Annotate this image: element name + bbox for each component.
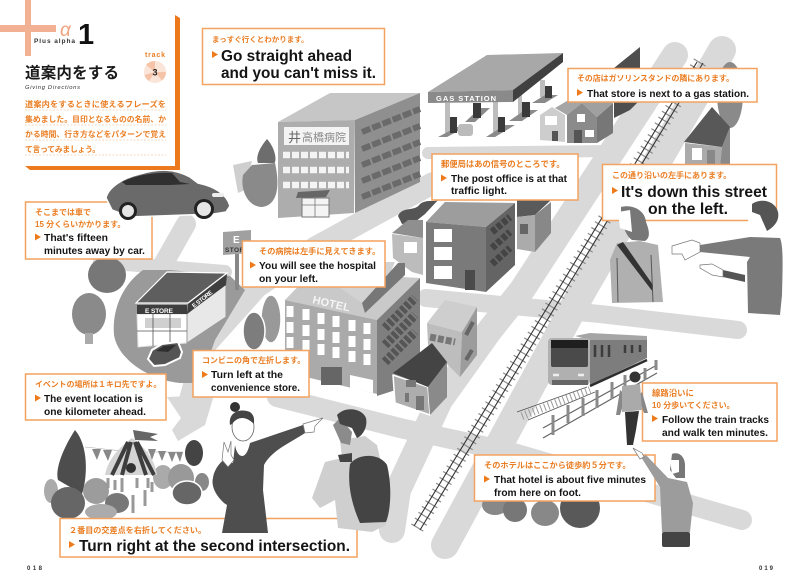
callout: go straight: Go straight ahead [221,48,352,65]
gas station: GAS STATION [436,94,496,103]
callout: event location: one kilometer ahead. [44,407,146,418]
callout: gas station [568,68,757,102]
hotel [285,262,420,396]
callout: follow train tracks: and walk ten minutes. [662,428,768,439]
alpha symbol: α [60,20,72,41]
callout: event location: The event location is [44,394,143,405]
callout: down this street: この通り沿いの左手にあります。 [612,170,731,180]
callout: turn left [193,350,309,397]
trees bottom right [482,488,600,528]
lesson number: 1 [78,19,94,51]
callout: event location [26,374,166,420]
callout: turn right: ２番目の交差点を右折してください。 [69,525,206,535]
callout: post office: 郵便局はあの信号のところです。 [441,159,565,169]
hospital trees [233,139,277,207]
track badge [144,52,166,83]
callout: post office: traffic light. [451,186,507,197]
convenience store: E STORE [192,290,214,310]
title: 道案内をする [25,64,119,82]
callout: hospital [242,241,385,287]
intro paragraph: て言ってみましょう。 [25,145,100,154]
callout: hospital: You will see the hospital [259,261,376,272]
callout: hospital: on your left. [259,274,318,285]
plus symbol [0,0,56,56]
callout: hospital: その病院は左手に見えてきます。 [259,246,380,256]
callout: hotel: That hotel is about five minutes [494,475,646,486]
E store sign [223,230,251,290]
walking man with backpack [616,372,648,445]
callout: follow train tracks: 線路沿いに [652,388,694,398]
callout: turn right: Turn right at the second intersection. [79,538,350,555]
callout: fifteen minutes: そこまでは車で [35,207,91,217]
callout: go straight: まっすぐ行くとわかります。 [212,34,308,44]
parked car [148,342,182,366]
hospital building: 井 [288,130,301,145]
callout: hotel: そのホテルはここから徒歩約５分です。 [484,460,631,470]
callout: event location: イベントの場所は１キロ先ですよ。 [35,379,161,389]
car [106,170,230,220]
callout: go straight [202,28,384,84]
hotel: HOTEL [311,294,351,315]
fence [543,360,657,438]
callout: turn right [60,518,357,557]
header decoration: plus alpha [0,0,180,170]
hospital building: 高橋病院 [302,130,346,144]
gas station [428,53,563,137]
callout: down this street: on the left. [648,201,728,218]
festival scene [44,430,209,520]
callout: fifteen minutes: That's fifteen [44,233,108,244]
railway tracks [414,62,703,530]
track badge: 3 [152,68,158,78]
street map roads [100,50,742,545]
plus alpha label: Plus alpha [34,38,75,45]
convenience store [136,272,227,347]
page number right: 019 [759,566,774,572]
callout: down this street: It's down this street [621,184,768,201]
trees along road [72,257,281,350]
train and rails [517,333,647,420]
convenience store: E STORE [145,308,174,315]
people giving directions [610,201,783,315]
callout: fifteen minutes: 15 分くらいかかります。 [35,219,125,229]
callout: gas station: That store is next to a gas station. [587,89,749,100]
track badge: track [145,52,165,59]
houses and dark building by gas station [540,47,640,143]
callout: down this street [602,164,776,220]
page number left: 018 [27,566,43,572]
hospital building [278,93,420,218]
store parking lot [114,270,245,383]
callout: go straight: and you can't miss it. [221,65,376,82]
callout: turn left: コンビニの角で左折します。 [202,355,305,365]
callout: hotel: from here on foot. [494,488,581,499]
woman with shoulder bag [610,206,663,303]
small house [393,343,447,415]
post office area buildings [392,198,551,292]
man with backpack [312,409,390,532]
callout: turn left: convenience store. [211,383,300,394]
subtitle: Giving Directions [25,85,80,91]
light building [427,300,477,377]
callout: post office [432,154,578,200]
callout: gas station: その店はガソリンスタンドの隣にあります。 [577,73,734,83]
intro paragraph: 道案内をするときに使えるフレーズを [25,99,166,109]
woman pointing at hotel [633,448,693,547]
intro paragraph: 集めました。目印となるものの名前、か [25,114,166,124]
callout: hotel [474,455,655,501]
woman pointing [212,402,323,533]
callout: turn left: Turn left at the [211,370,283,381]
callout: fifteen minutes: minutes away by car. [44,246,145,257]
callout: post office: The post office is at that [451,174,568,185]
callout: fifteen minutes [26,202,152,259]
house and tree on the right [684,62,743,165]
intro paragraph [25,99,166,155]
E store sign: E [233,235,240,246]
intro paragraph: かる時間、行き方などをパターンで覚え [25,129,166,139]
callout: follow train tracks: Follow the train tracks [662,415,769,426]
callout: follow train tracks: 10 分歩いてください。 [652,400,735,410]
panel: title card [25,15,180,170]
E store sign: STORE [225,247,250,254]
man pointing [672,201,783,315]
callout: follow train tracks [642,383,777,441]
